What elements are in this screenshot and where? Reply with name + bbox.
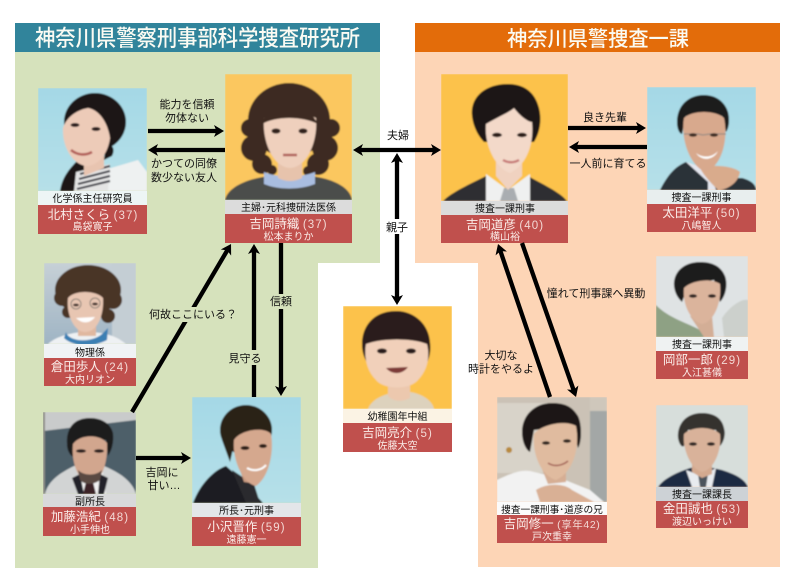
name plate — [656, 351, 748, 379]
actor: 遠藤憲一 — [226, 533, 266, 546]
card: Ozawa Shinsaku — [192, 397, 301, 546]
label: soft on Yoshioka: 甘い… — [148, 479, 180, 492]
card: Yoshioka Michihiko — [441, 74, 568, 243]
label: watch over: 見守る — [228, 352, 262, 365]
name: 倉田歩人 (24) — [51, 359, 129, 374]
arrow: Ozawa to Shiori — [252, 248, 256, 397]
name plate — [647, 204, 756, 232]
role: 化学係主任研究員 — [52, 192, 132, 205]
name plate — [497, 515, 607, 543]
name plate — [656, 501, 748, 528]
arrow: Ota to Michihiko — [573, 145, 647, 149]
role band — [441, 201, 568, 215]
panel: police division background — [415, 52, 780, 567]
role band — [192, 503, 301, 517]
role: 物理係 — [75, 346, 105, 359]
label: former colleague: 数少ない友人 — [151, 170, 217, 184]
actor: 佐藤大空 — [378, 439, 418, 452]
role: 所長･元刑事 — [219, 504, 274, 517]
actor: 大内リオン — [65, 373, 115, 386]
name: 金田誠也 (53) — [663, 501, 741, 516]
role: 捜査一課刑事 — [672, 191, 732, 204]
role: 副所長 — [75, 495, 105, 508]
label: former colleague: かつての同僚 — [151, 158, 217, 170]
actor: 戸次重幸 — [532, 530, 572, 543]
portrait: Shiori — [225, 74, 352, 200]
name plate — [44, 358, 136, 386]
role: 捜査一課刑事･道彦の兄 — [501, 503, 603, 516]
name plate — [192, 517, 301, 546]
actor: 渡辺いっけい — [672, 516, 732, 528]
label: trust: 勿体ない — [165, 110, 209, 124]
portrait: Kurata — [44, 263, 136, 345]
role band — [44, 344, 136, 358]
card: Ota Yohei — [647, 87, 756, 232]
role band — [497, 502, 607, 515]
name: 小沢晋作 (59) — [207, 520, 286, 534]
portrait: Shuichi — [497, 397, 607, 502]
name: 吉岡道彦 (40) — [466, 217, 544, 232]
card: Kurata Ayuto — [44, 263, 136, 386]
name: 吉岡修一 (享年42) — [504, 516, 600, 531]
portrait: Ryosuke — [343, 306, 452, 409]
name plate — [225, 214, 352, 243]
label: trust: 信頼 — [270, 294, 292, 308]
portrait: Okabe — [656, 256, 748, 337]
label: train up: 一人前に育てる — [570, 156, 646, 170]
label: why are you here: 何故ここにいる？ — [149, 307, 237, 321]
heading: police division: 神奈川県警捜査一課 — [507, 28, 689, 51]
label: married couple: 夫婦 — [387, 129, 409, 142]
role band — [38, 191, 147, 205]
name: 吉岡詩織 (37) — [249, 217, 328, 231]
heading: police division — [415, 23, 780, 52]
label: precious watch: 時計をやるよ — [468, 362, 534, 376]
actor: 八嶋智人 — [682, 219, 722, 232]
arrow: parent and child — [395, 157, 399, 301]
role band — [43, 494, 136, 507]
portrait: Kitamura — [38, 88, 147, 191]
label: soft on Yoshioka: 吉岡に — [146, 467, 178, 479]
role band — [656, 487, 748, 501]
name: 太田洋平 (50) — [662, 205, 741, 220]
arrow: Michihiko to Ota — [568, 126, 642, 130]
name: 北村さくら (37) — [48, 208, 138, 222]
arrow: Shuichi to Michihiko — [499, 248, 550, 397]
actor: 入江甚儀 — [682, 366, 722, 379]
name plate — [43, 507, 136, 536]
card: Kitamura Sakura — [38, 88, 147, 234]
label: precious watch: 大切な — [484, 350, 518, 362]
actor: 小手伸也 — [70, 523, 110, 536]
arrow: married couple — [357, 148, 437, 152]
card: Yoshioka Ryosuke — [343, 306, 452, 452]
label: parent and child: 親子 — [386, 221, 408, 234]
role band — [225, 200, 352, 214]
role: 捜査一課刑事 — [475, 202, 535, 215]
arrow: Kitamura to Shiori — [148, 129, 220, 133]
portrait: Kaneda — [656, 405, 748, 487]
name plate — [441, 215, 568, 243]
label: trust: 能力を信頼 — [160, 99, 214, 111]
name: 加藤浩紀 (48) — [51, 510, 129, 524]
portrait: Ozawa — [192, 397, 301, 503]
heading: science institute: 神奈川県警察刑事部科学捜査研究所 — [35, 26, 360, 51]
arrow: Kato to Shiori — [132, 247, 229, 412]
actor: 横山裕 — [490, 230, 520, 243]
portrait: Michihiko — [441, 74, 568, 201]
card: Kato Hiroki — [43, 412, 136, 536]
actor: 松本まりか — [264, 230, 314, 243]
role band — [647, 190, 756, 204]
role band — [343, 409, 452, 423]
card: Kaneda Seiya — [656, 405, 748, 528]
name plate — [38, 205, 147, 234]
panel: science institute background — [15, 52, 380, 568]
card: Okabe Ichiro — [656, 256, 748, 379]
name plate — [343, 423, 452, 452]
card: Yoshioka Shiori — [225, 74, 352, 243]
arrow: Shiori to Kitamura — [152, 148, 225, 152]
name: 吉岡亮介 (5) — [362, 426, 433, 440]
card: Yoshioka Shuichi — [497, 397, 607, 543]
arrow: Kato to Ozawa — [136, 456, 187, 460]
role: 幼稚園年中組 — [368, 410, 428, 423]
actor: 島袋寛子 — [72, 220, 112, 233]
label: transferred: 憧れて刑事課へ異動 — [547, 286, 645, 300]
role: 捜査一課刑事 — [672, 338, 732, 351]
portrait: Ota — [647, 87, 756, 190]
role: 主婦･元科捜研法医係 — [241, 201, 336, 214]
arrow: Shiori to Ozawa — [279, 243, 283, 392]
label: good senior: 良き先輩 — [583, 111, 627, 124]
role band — [656, 337, 748, 351]
portrait: Kato — [43, 412, 136, 494]
role: 捜査一課課長 — [672, 488, 732, 501]
arrow: Michihiko to Shuichi — [522, 243, 575, 393]
name: 岡部一郎 (29) — [663, 353, 741, 367]
